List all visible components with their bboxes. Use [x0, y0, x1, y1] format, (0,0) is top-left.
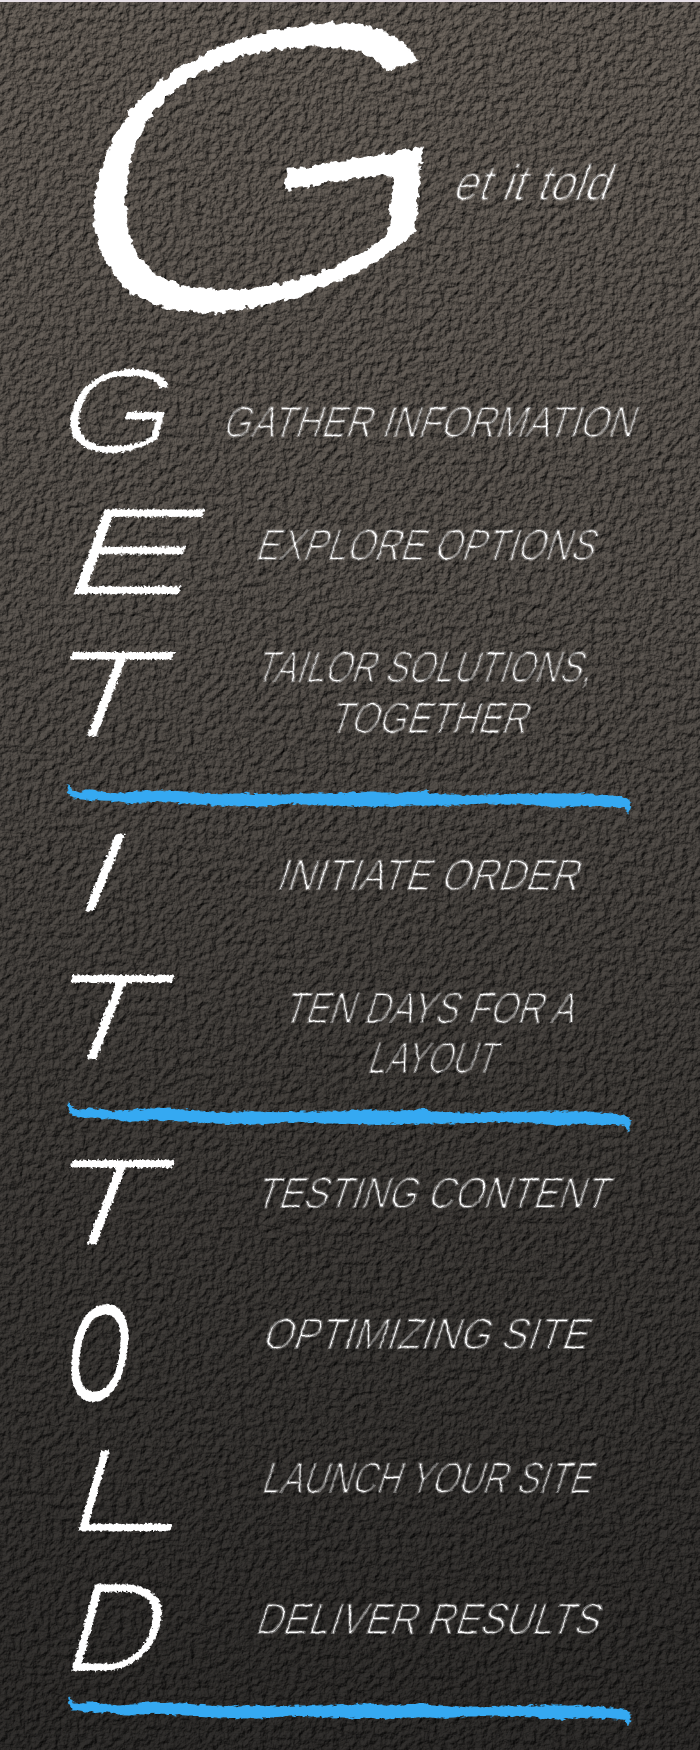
label: optimizing site: OPTIMIZING SITE — [258, 1309, 599, 1359]
blue brush divider 2 — [69, 1103, 630, 1131]
label: tailor solutions, together: TAILOR SOLUTIONS, — [251, 642, 603, 692]
label: tailor solutions, together — [251, 642, 603, 743]
letter D: D — [51, 1555, 187, 1700]
letter G: G — [43, 342, 198, 479]
letter I: I — [58, 808, 152, 937]
letter E: E — [42, 482, 233, 622]
blue brush divider 1 — [69, 785, 630, 813]
label: testing content: TESTING CONTENT — [251, 1168, 619, 1218]
label: deliver results: DELIVER RESULTS — [251, 1594, 610, 1644]
label: launch your site: LAUNCH YOUR SITE — [257, 1453, 603, 1503]
letter T (testing): T — [21, 1132, 195, 1272]
blue brush divider 3 — [69, 1697, 630, 1725]
label: explore options: EXPLORE OPTIONS — [251, 520, 606, 570]
tagline: et it told: et it told — [447, 154, 624, 211]
label: ten days for a layout — [279, 983, 587, 1083]
label: ten days for a layout: TEN DAYS FOR A — [279, 983, 587, 1033]
letter T (tailor): T — [21, 624, 195, 764]
label: tailor solutions, together: TOGETHER — [325, 693, 539, 743]
label: ten days for a layout: LAYOUT — [363, 1033, 507, 1083]
letter T (ten days): T — [21, 947, 195, 1087]
label: initiate order: INITIATE ORDER — [272, 850, 590, 900]
letter O: O — [58, 1277, 142, 1431]
letter L: L — [44, 1424, 217, 1558]
title logo: Get it told — [39, 0, 624, 433]
